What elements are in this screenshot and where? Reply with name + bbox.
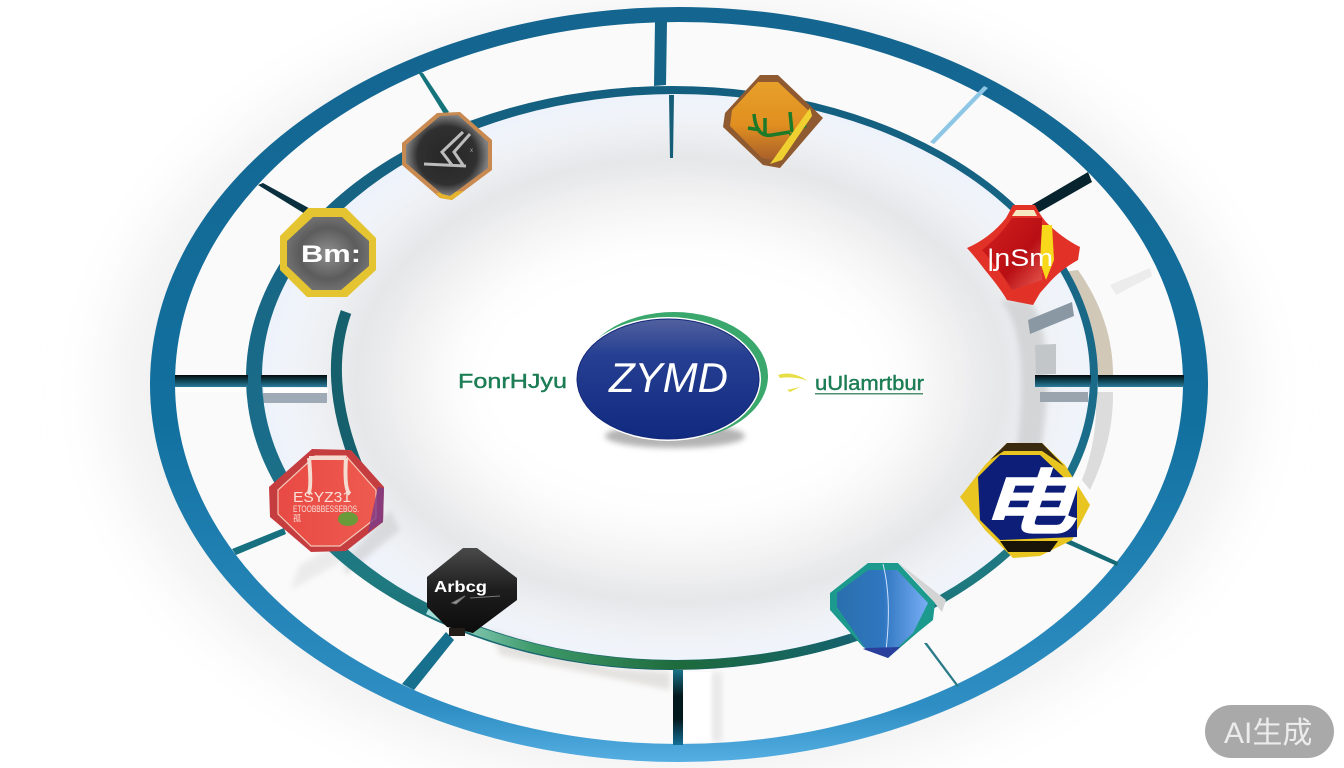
- green crescent: [580, 312, 768, 440]
- label: left: FonrHJyu: [458, 371, 567, 393]
- watermark: AI badge: [1205, 705, 1334, 758]
- spoke: top inner: [669, 95, 674, 158]
- node: black hexagon: [427, 548, 517, 636]
- node: navy badge: 电: [978, 444, 1081, 549]
- center label: ZYMD: [608, 354, 728, 401]
- spoke: right lower: [1063, 538, 1118, 566]
- label: right: uUlamrtbur: [815, 373, 924, 395]
- spoke: lower left: [232, 528, 286, 555]
- center node: [575, 312, 768, 448]
- node: red octagon: [269, 449, 384, 552]
- spoke: top outer: [654, 21, 667, 86]
- node: dark X hexagon: [402, 112, 492, 200]
- spoke: upper right: [1030, 172, 1092, 214]
- node: red badge: |ɲSm: [987, 245, 1053, 272]
- spoke: upper right light: [930, 86, 988, 144]
- spoke: right inner: [1035, 375, 1091, 387]
- node: black hexagon: Arbcg: [434, 579, 487, 596]
- spoke: bottom: [673, 670, 683, 745]
- panel: annulus between rings: [159, 14, 1199, 754]
- node: red badge: [967, 205, 1080, 305]
- node: red octagon: ETOOBBBESSEBOS.: [293, 504, 359, 514]
- spoke: left inner: [261, 375, 327, 387]
- spokes: [175, 21, 1184, 745]
- soft shading inside the disc: [176, 230, 1152, 742]
- main ring bottom tint: [428, 610, 850, 665]
- node: Bm octagon: [280, 208, 376, 297]
- inner arc left: [336, 312, 358, 468]
- spoke: bottom left: [402, 632, 454, 690]
- node: blue hexagon: [830, 563, 946, 658]
- panel: inner disc: [254, 90, 1094, 666]
- node: dark X hexagon: x: [470, 148, 473, 154]
- spoke: left upper: [258, 183, 316, 217]
- outer ring: [150, 7, 1208, 762]
- spoke: left outer: [175, 375, 248, 387]
- node: red octagon: ESYZ31: [293, 489, 351, 506]
- shadow: [605, 424, 745, 448]
- navy oval: [577, 319, 759, 439]
- arrow: yellow swoosh: [778, 373, 808, 392]
- node: orange diamond: [723, 75, 823, 168]
- white rim: [575, 317, 761, 441]
- main ring: [246, 86, 1098, 670]
- node: navy badge: [960, 443, 1090, 558]
- watermark: AI badge: AI生成: [1224, 717, 1312, 750]
- spoke: upper left: [418, 72, 449, 114]
- spoke: lower right thin: [924, 643, 959, 687]
- spoke: right outer: [1098, 375, 1184, 387]
- node: Bm octagon: Bm:: [301, 241, 361, 268]
- node: red octagon: 孤: [293, 513, 301, 523]
